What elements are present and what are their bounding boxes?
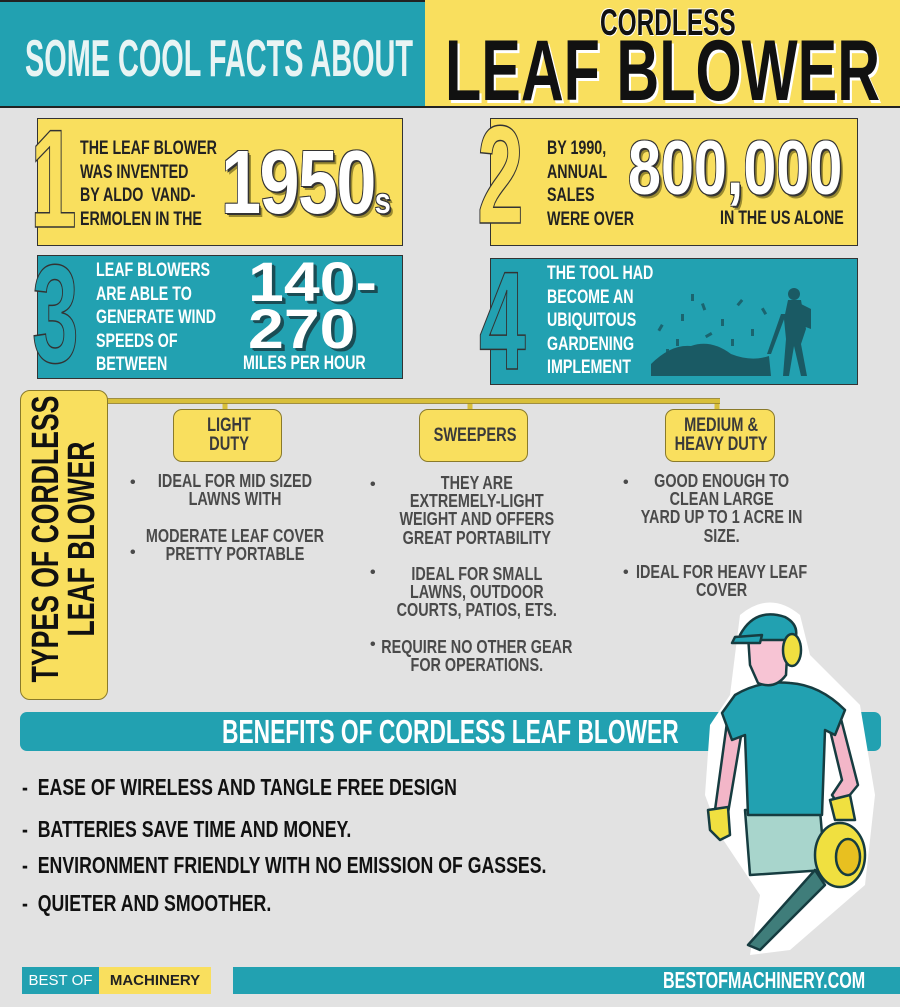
fact 1 (37, 118, 403, 246)
fact 3 text: GENERATE WIND (96, 307, 216, 328)
column: medium & heavy text: • (623, 564, 629, 581)
pill: medium & heavy duty: HEAVY DUTY (675, 434, 768, 455)
heading: leaf blower: LEAF BLOWER (445, 23, 880, 119)
benefits list: - QUIETER AND SMOOTHER. (22, 890, 271, 916)
fact 3 number: 270 (248, 297, 355, 360)
fact 2 number: 800,000 (628, 126, 842, 211)
benefits list (22, 774, 546, 916)
column: sweepers text (370, 473, 572, 675)
column: sweepers text: LAWNS, OUTDOOR (410, 582, 544, 602)
fact 4 text: IMPLEMENT (547, 357, 631, 378)
pill: medium & heavy duty (665, 409, 775, 462)
fact 1 number: 1950s (221, 133, 389, 233)
column: light duty text (130, 471, 324, 564)
column: sweepers text: • (370, 476, 376, 493)
footer logo (22, 967, 211, 994)
number 1: 1 (30, 100, 77, 257)
fact 1 text: BY ALDO VAND- (80, 185, 195, 206)
column: medium & heavy text: • (623, 474, 629, 491)
column: sweepers text: EXTREMELY-LIGHT (410, 491, 544, 511)
fact 3 number: 140- (248, 250, 377, 313)
fact 2 (490, 118, 858, 246)
fact 2 text: BY 1990, (547, 138, 606, 159)
benefits list: - BATTERIES SAVE TIME AND MONEY. (22, 816, 351, 842)
footer logo: BEST OF (29, 972, 92, 989)
column: medium & heavy text: COVER (696, 580, 747, 600)
fact 2 caption: IN THE US ALONE (720, 208, 844, 229)
column: medium & heavy text: IDEAL FOR HEAVY LEAF (636, 562, 807, 582)
column: sweepers text: GREAT PORTABILITY (403, 528, 551, 548)
fact 4 (490, 258, 858, 385)
fact 3 number (248, 250, 378, 360)
column: light duty text: • (130, 474, 136, 491)
panel: types of cordless leaf blower: LEAF BLOWER (61, 441, 103, 637)
fact 1 text: WAS INVENTED (80, 162, 188, 182)
column: light duty text: MODERATE LEAF COVER (146, 526, 324, 546)
footer logo: MACHINERY (110, 972, 200, 989)
panel: types of cordless leaf blower: TYPES OF CORDLESS (25, 396, 67, 682)
fact 3 text (96, 260, 216, 375)
column: sweepers text: WEIGHT AND OFFERS (399, 509, 554, 529)
column: light duty text: IDEAL FOR MID SIZED (158, 471, 312, 491)
heading: some cool facts about: SOME COOL FACTS ABOUT (25, 30, 413, 88)
column: medium & heavy text (623, 471, 807, 600)
fact 4 text: THE TOOL HAD (547, 263, 653, 284)
fact 2 text (547, 138, 634, 230)
benefits list: - EASE OF WIRELESS AND TANGLE FREE DESIGN (22, 774, 457, 800)
column: light duty text: • (130, 544, 136, 561)
benefits list: - ENVIRONMENT FRIENDLY WITH NO EMISSION OF GASSES. (22, 852, 546, 878)
vertical heading (25, 396, 103, 682)
header: yellow right (425, 0, 900, 108)
column: sweepers text: THEY ARE (441, 473, 513, 493)
column: sweepers text: • (370, 564, 376, 581)
column: light duty text: LAWNS WITH (189, 489, 281, 509)
footer bar (233, 967, 900, 994)
column: light duty text: PRETTY PORTABLE (166, 544, 304, 564)
number 4: 4 (479, 242, 526, 399)
column: sweepers text: COURTS, PATIOS, ETS. (397, 600, 557, 620)
column: medium & heavy text: SIZE. (704, 526, 740, 546)
fact 4 text: BECOME AN (547, 286, 634, 308)
icon: silhouette blowing leaves (651, 288, 811, 376)
column: medium & heavy text: YARD UP TO 1 ACRE IN (641, 507, 802, 527)
pill: light duty: LIGHT (207, 415, 251, 436)
pill: medium & heavy duty: MEDIUM & (684, 415, 758, 436)
column: sweepers text: FOR OPERATIONS. (411, 655, 543, 675)
benefits heading text: BENEFITS OF CORDLESS LEAF BLOWER (222, 713, 679, 750)
fact 3 caption: MILES PER HOUR (243, 353, 366, 374)
column: sweepers text: • (370, 636, 376, 653)
illustration: worker with leaf blower (705, 602, 875, 955)
connector lines (108, 398, 720, 409)
fact 3 text: ARE ABLE TO (96, 284, 192, 304)
column: medium & heavy text: GOOD ENOUGH TO (654, 471, 789, 491)
fact 2 text: SALES (547, 185, 595, 206)
header: teal left (0, 0, 425, 108)
fact 3 text: LEAF BLOWERS (96, 260, 210, 281)
number 2: 2 (477, 96, 524, 253)
fact 4 text: UBIQUITOUS (547, 310, 636, 331)
fact 3 (37, 255, 403, 379)
fact 1 text: THE LEAF BLOWER (80, 138, 217, 159)
pill: light duty (173, 409, 282, 462)
fact 4 text (547, 263, 653, 378)
footer url: BESTOFMACHINERY.COM (663, 967, 865, 993)
fact 1 text: ERMOLEN IN THE (80, 208, 202, 230)
column: sweepers text: IDEAL FOR SMALL (411, 564, 542, 584)
benefits heading bar (20, 712, 881, 751)
fact 1 text (80, 138, 217, 230)
fact 4 text: GARDENING (547, 334, 634, 354)
pill: sweepers (419, 409, 528, 462)
column: medium & heavy text: CLEAN LARGE (670, 489, 774, 509)
fact 3 text: SPEEDS OF (96, 330, 178, 352)
fact 2 text: WERE OVER (547, 208, 634, 230)
panel: types of cordless leaf blower (20, 390, 108, 700)
number 3: 3 (32, 235, 79, 392)
pill: sweepers: SWEEPERS (434, 424, 517, 446)
column: sweepers text: REQUIRE NO OTHER GEAR (381, 637, 572, 657)
heading: cordless: CORDLESS (600, 2, 736, 43)
fact 2 text: ANNUAL (547, 162, 607, 182)
fact 3 text: BETWEEN (96, 354, 167, 375)
pill: light duty: DUTY (209, 434, 249, 455)
